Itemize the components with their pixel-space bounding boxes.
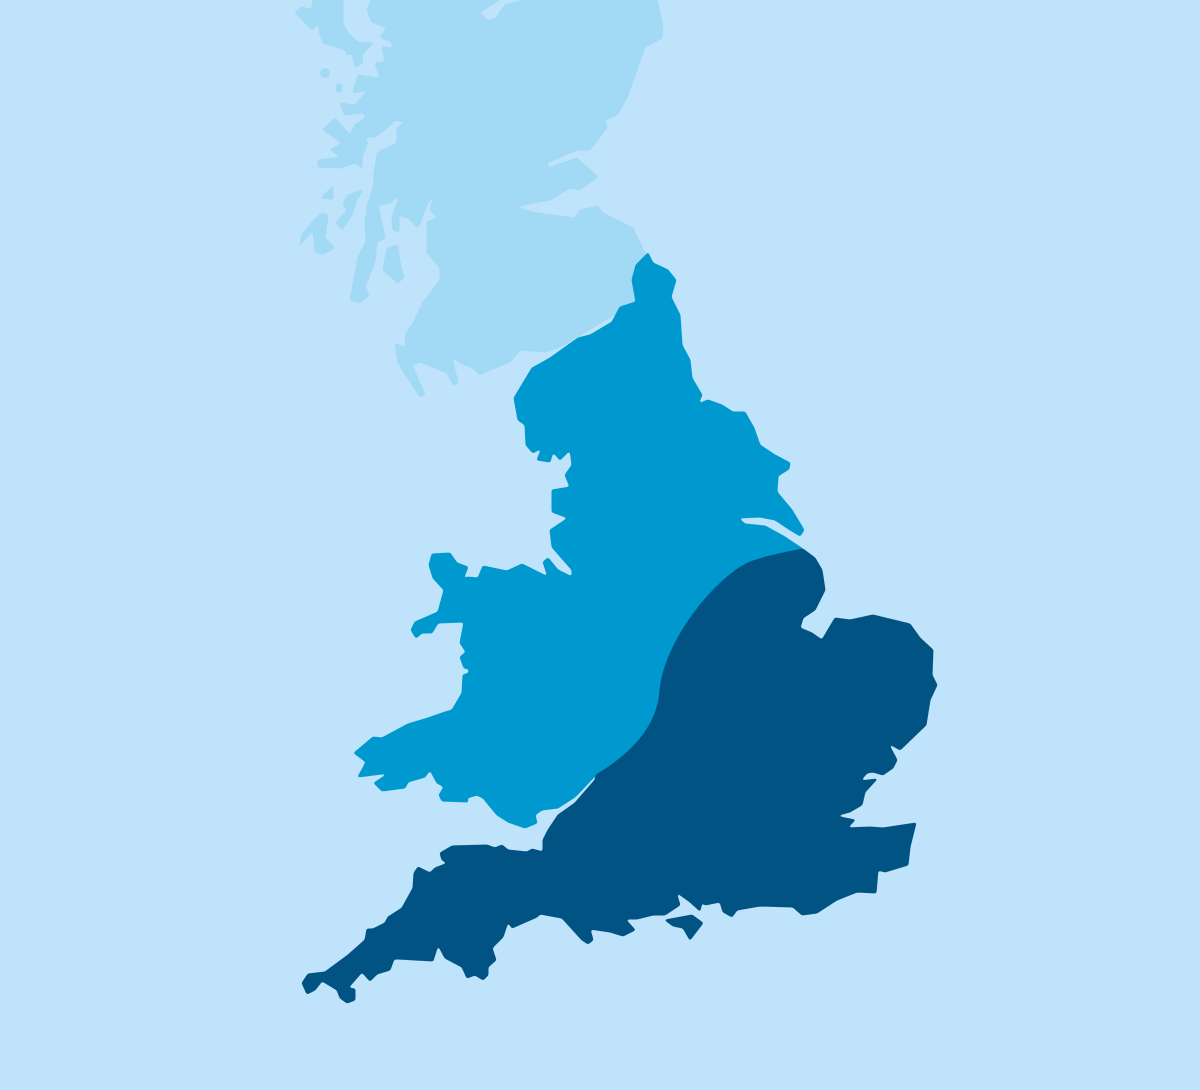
island: northern peninsula [295, 0, 373, 67]
island: tiny western isle [336, 84, 342, 92]
island: Islay [300, 213, 335, 254]
inlet: pale lake at top of Scotland [480, 0, 522, 20]
island: Jura [336, 190, 363, 230]
island: small western isle [320, 68, 330, 78]
region: south and east England (dark blue) [302, 549, 937, 1003]
island: Arran [383, 245, 404, 283]
region: Scotland (pale blue) [295, 0, 663, 397]
region: northern England and Wales (mid blue) [354, 253, 806, 828]
island: triangular isle [321, 186, 333, 199]
island: Isle of Wight [665, 915, 703, 940]
